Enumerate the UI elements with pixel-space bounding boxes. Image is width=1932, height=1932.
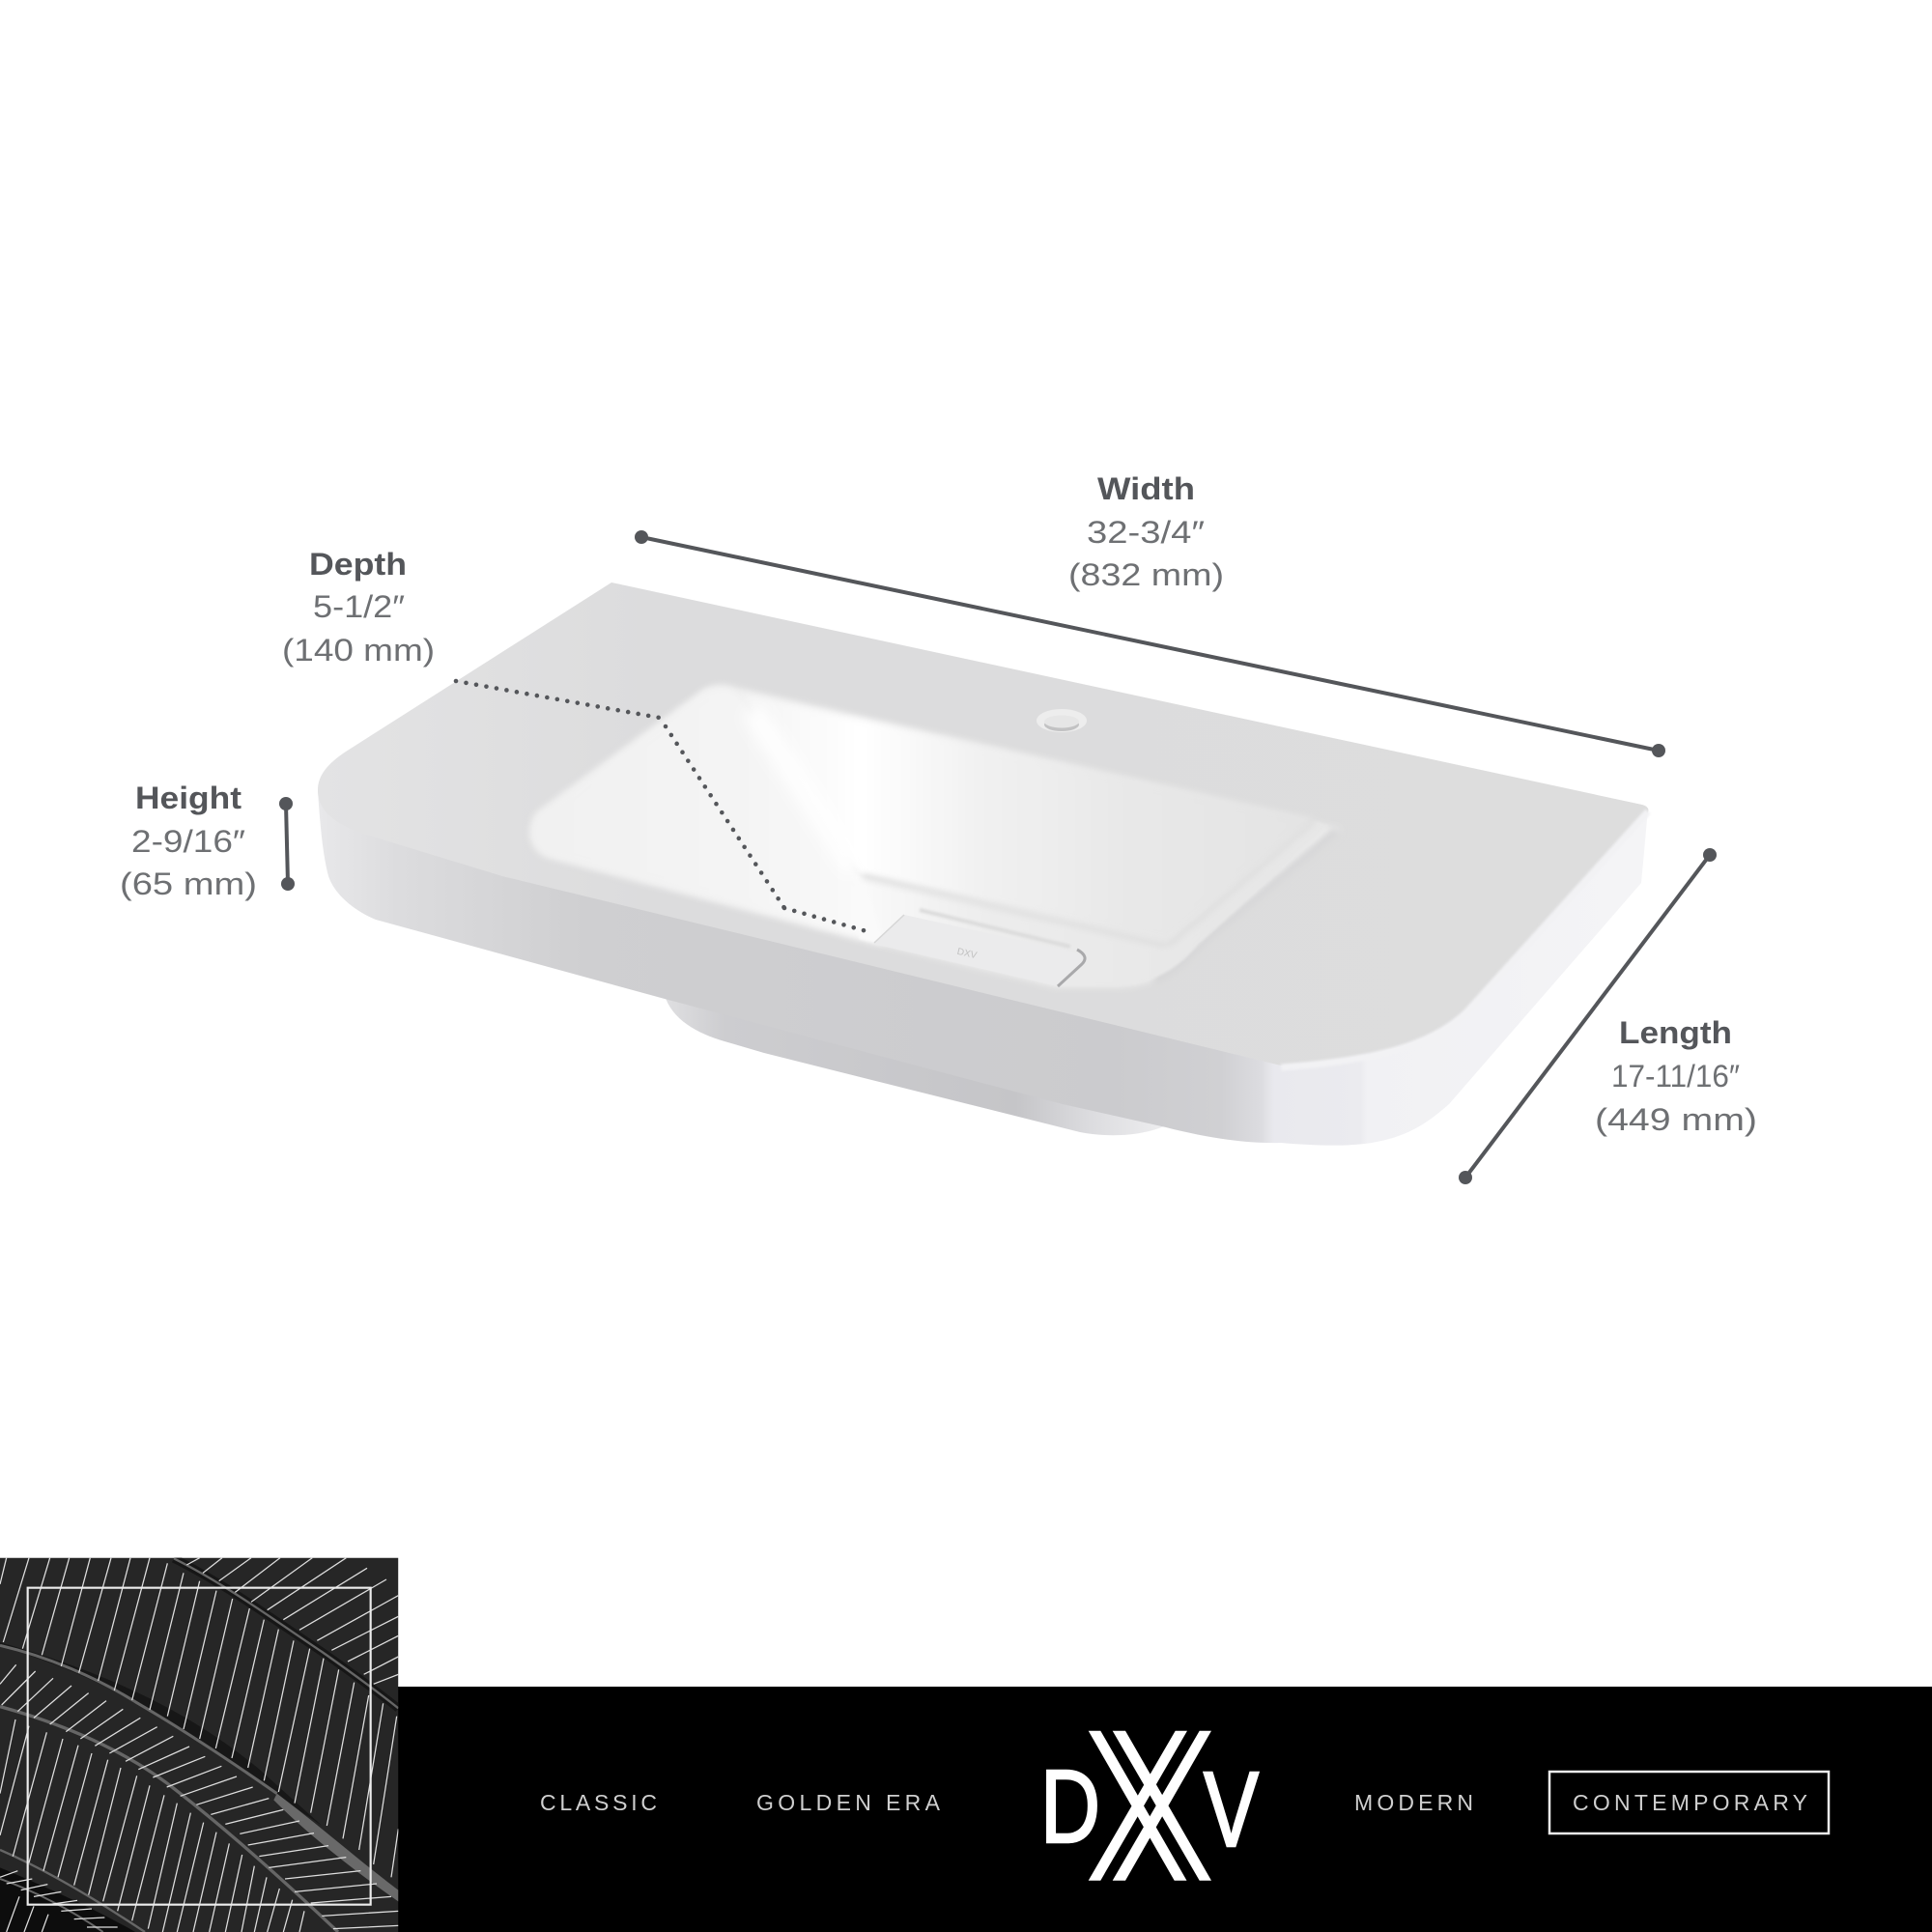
basin shelf xyxy=(850,821,1328,985)
basin outer recess xyxy=(529,685,1341,987)
infographic canvas xyxy=(0,477,1932,1932)
nav label: classic: CLASSIC xyxy=(540,1790,657,1815)
width label: Width xyxy=(1097,471,1195,506)
drain cover xyxy=(873,910,1085,986)
width label: (832 mm) xyxy=(1068,557,1224,592)
length label: 17-11/16″ xyxy=(1611,1059,1740,1094)
faucet hole xyxy=(1037,709,1087,732)
depth label: Depth xyxy=(309,547,407,582)
nav label: modern: MODERN xyxy=(1354,1790,1473,1815)
photo inset frame xyxy=(28,1588,371,1905)
depth label xyxy=(282,547,435,668)
height label: Height xyxy=(135,781,242,815)
basin rim shadow xyxy=(1154,831,1337,980)
length label: (449 mm) xyxy=(1595,1102,1757,1137)
nav label: golden era: GOLDEN ERA xyxy=(756,1790,941,1815)
sink top surface xyxy=(318,582,1648,1065)
height label: 2-9/16″ xyxy=(131,824,245,859)
length dimension line xyxy=(1459,848,1717,1184)
height label: (65 mm) xyxy=(120,867,257,901)
length label: Length xyxy=(1619,1015,1732,1050)
basin bright ridge xyxy=(752,710,855,869)
cover logo: DXV xyxy=(956,947,978,961)
basin left slope xyxy=(532,687,884,945)
depth label: 5-1/2″ xyxy=(313,589,405,624)
nav selected box: contemporary: CONTEMPORARY xyxy=(1573,1790,1807,1815)
width dimension line xyxy=(635,530,1665,757)
height dimension line xyxy=(279,797,295,891)
sink pedestal xyxy=(665,966,1171,1135)
DXV logo xyxy=(1040,1731,1259,1881)
length label xyxy=(1595,1015,1757,1137)
sink front fascia xyxy=(318,790,1648,1146)
basin step line xyxy=(863,820,1315,944)
footer black band xyxy=(0,1687,1932,1932)
height label xyxy=(120,781,257,901)
width label: 32-3/4″ xyxy=(1087,515,1205,550)
DXV logo: D xyxy=(1040,1747,1100,1864)
logo crossed X mark xyxy=(1089,1731,1211,1881)
nav selected box: contemporary xyxy=(1549,1772,1829,1833)
depth label: (140 mm) xyxy=(282,633,435,668)
sink basin xyxy=(529,685,1341,987)
right edge highlight xyxy=(1281,811,1648,1067)
DXV logo: V xyxy=(1204,1750,1259,1869)
architectural photo panel xyxy=(0,1558,398,1932)
width label xyxy=(1068,471,1224,592)
sink product illustration xyxy=(318,582,1648,1146)
depth dotted guide xyxy=(456,681,873,933)
basin back wall xyxy=(739,692,1315,942)
